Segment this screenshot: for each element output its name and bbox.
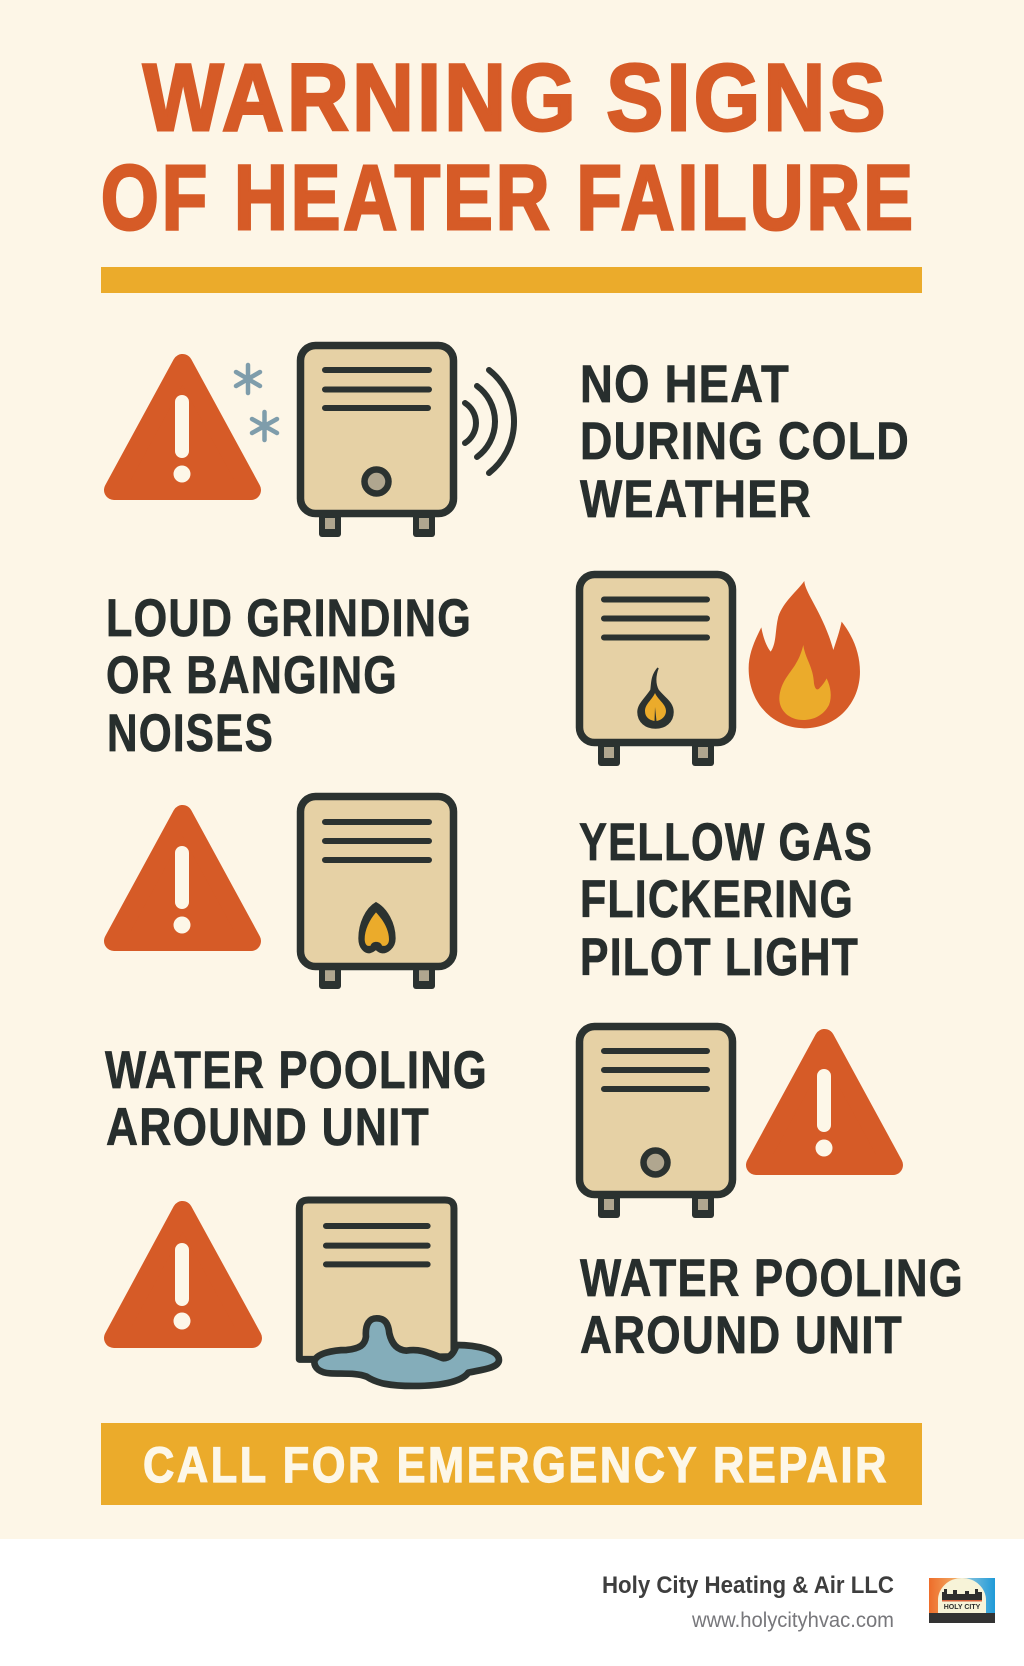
icon: sound waves xyxy=(465,370,514,473)
text: loud grinding or banging noises xyxy=(106,589,472,763)
icon: warning triangle xyxy=(114,815,251,941)
call to action banner: CALL FOR EMERGENCY REPAIR xyxy=(143,1437,889,1493)
text: loud grinding or banging noises: OR BANGING xyxy=(106,646,398,705)
panel: loud grinding or banging noises xyxy=(106,574,860,766)
text: yellow gas flickering pilot light: PILOT LIGHT xyxy=(580,928,859,987)
title divider bar xyxy=(101,267,922,293)
text: no heat during cold weather: NO HEAT xyxy=(580,355,790,414)
text: water pooling around unit xyxy=(580,1249,964,1365)
icon: snowflakes xyxy=(236,365,277,440)
text: no heat during cold weather: DURING COLD xyxy=(580,412,910,471)
panel: water pooling with puddle xyxy=(114,1200,964,1386)
icon: leaking heater with puddle xyxy=(299,1200,499,1386)
text: water pooling around unit: AROUND UNIT xyxy=(580,1306,903,1365)
icon: heater with yellow flame xyxy=(300,796,454,989)
footer: company name and website: Holy City Heating & Air LLC xyxy=(602,1572,894,1599)
text: water pooling around unit: AROUND UNIT xyxy=(106,1098,430,1157)
call to action banner xyxy=(101,1423,922,1505)
text: no heat during cold weather: WEATHER xyxy=(580,470,812,529)
panel: yellow gas flickering pilot light xyxy=(114,796,873,989)
icon: heater with pilot flame xyxy=(580,574,732,766)
text: water pooling around unit: WATER POOLING xyxy=(105,1041,488,1100)
text: loud grinding or banging noises: NOISES xyxy=(107,704,274,763)
text: yellow gas flickering pilot light: YELLOW GAS xyxy=(579,813,873,872)
text: yellow gas flickering pilot light xyxy=(579,813,873,987)
footer logo xyxy=(929,1578,995,1623)
footer: company name and website xyxy=(602,1572,894,1632)
icon: large flame xyxy=(749,581,860,728)
title xyxy=(101,45,916,249)
footer: company name and website: www.holycityhvac.com xyxy=(691,1609,894,1632)
text: yellow gas flickering pilot light: FLICKERING xyxy=(580,870,854,929)
icon: warning triangle xyxy=(114,364,251,490)
title: WARNING SIGNS xyxy=(143,45,889,151)
text: water pooling around unit xyxy=(105,1041,488,1157)
icon: warning triangle xyxy=(114,1211,252,1338)
icon: heater with knob xyxy=(300,346,454,537)
text: no heat during cold weather xyxy=(580,355,910,529)
panel: no heat during cold weather xyxy=(114,346,910,537)
text: loud grinding or banging noises: LOUD GRINDING xyxy=(106,589,472,648)
panel: water pooling with heater and warning xyxy=(105,1026,893,1218)
icon: heater with knob xyxy=(580,1026,732,1218)
icon: warning triangle xyxy=(756,1039,893,1165)
footer logo: HOLY CITY xyxy=(944,1604,981,1611)
